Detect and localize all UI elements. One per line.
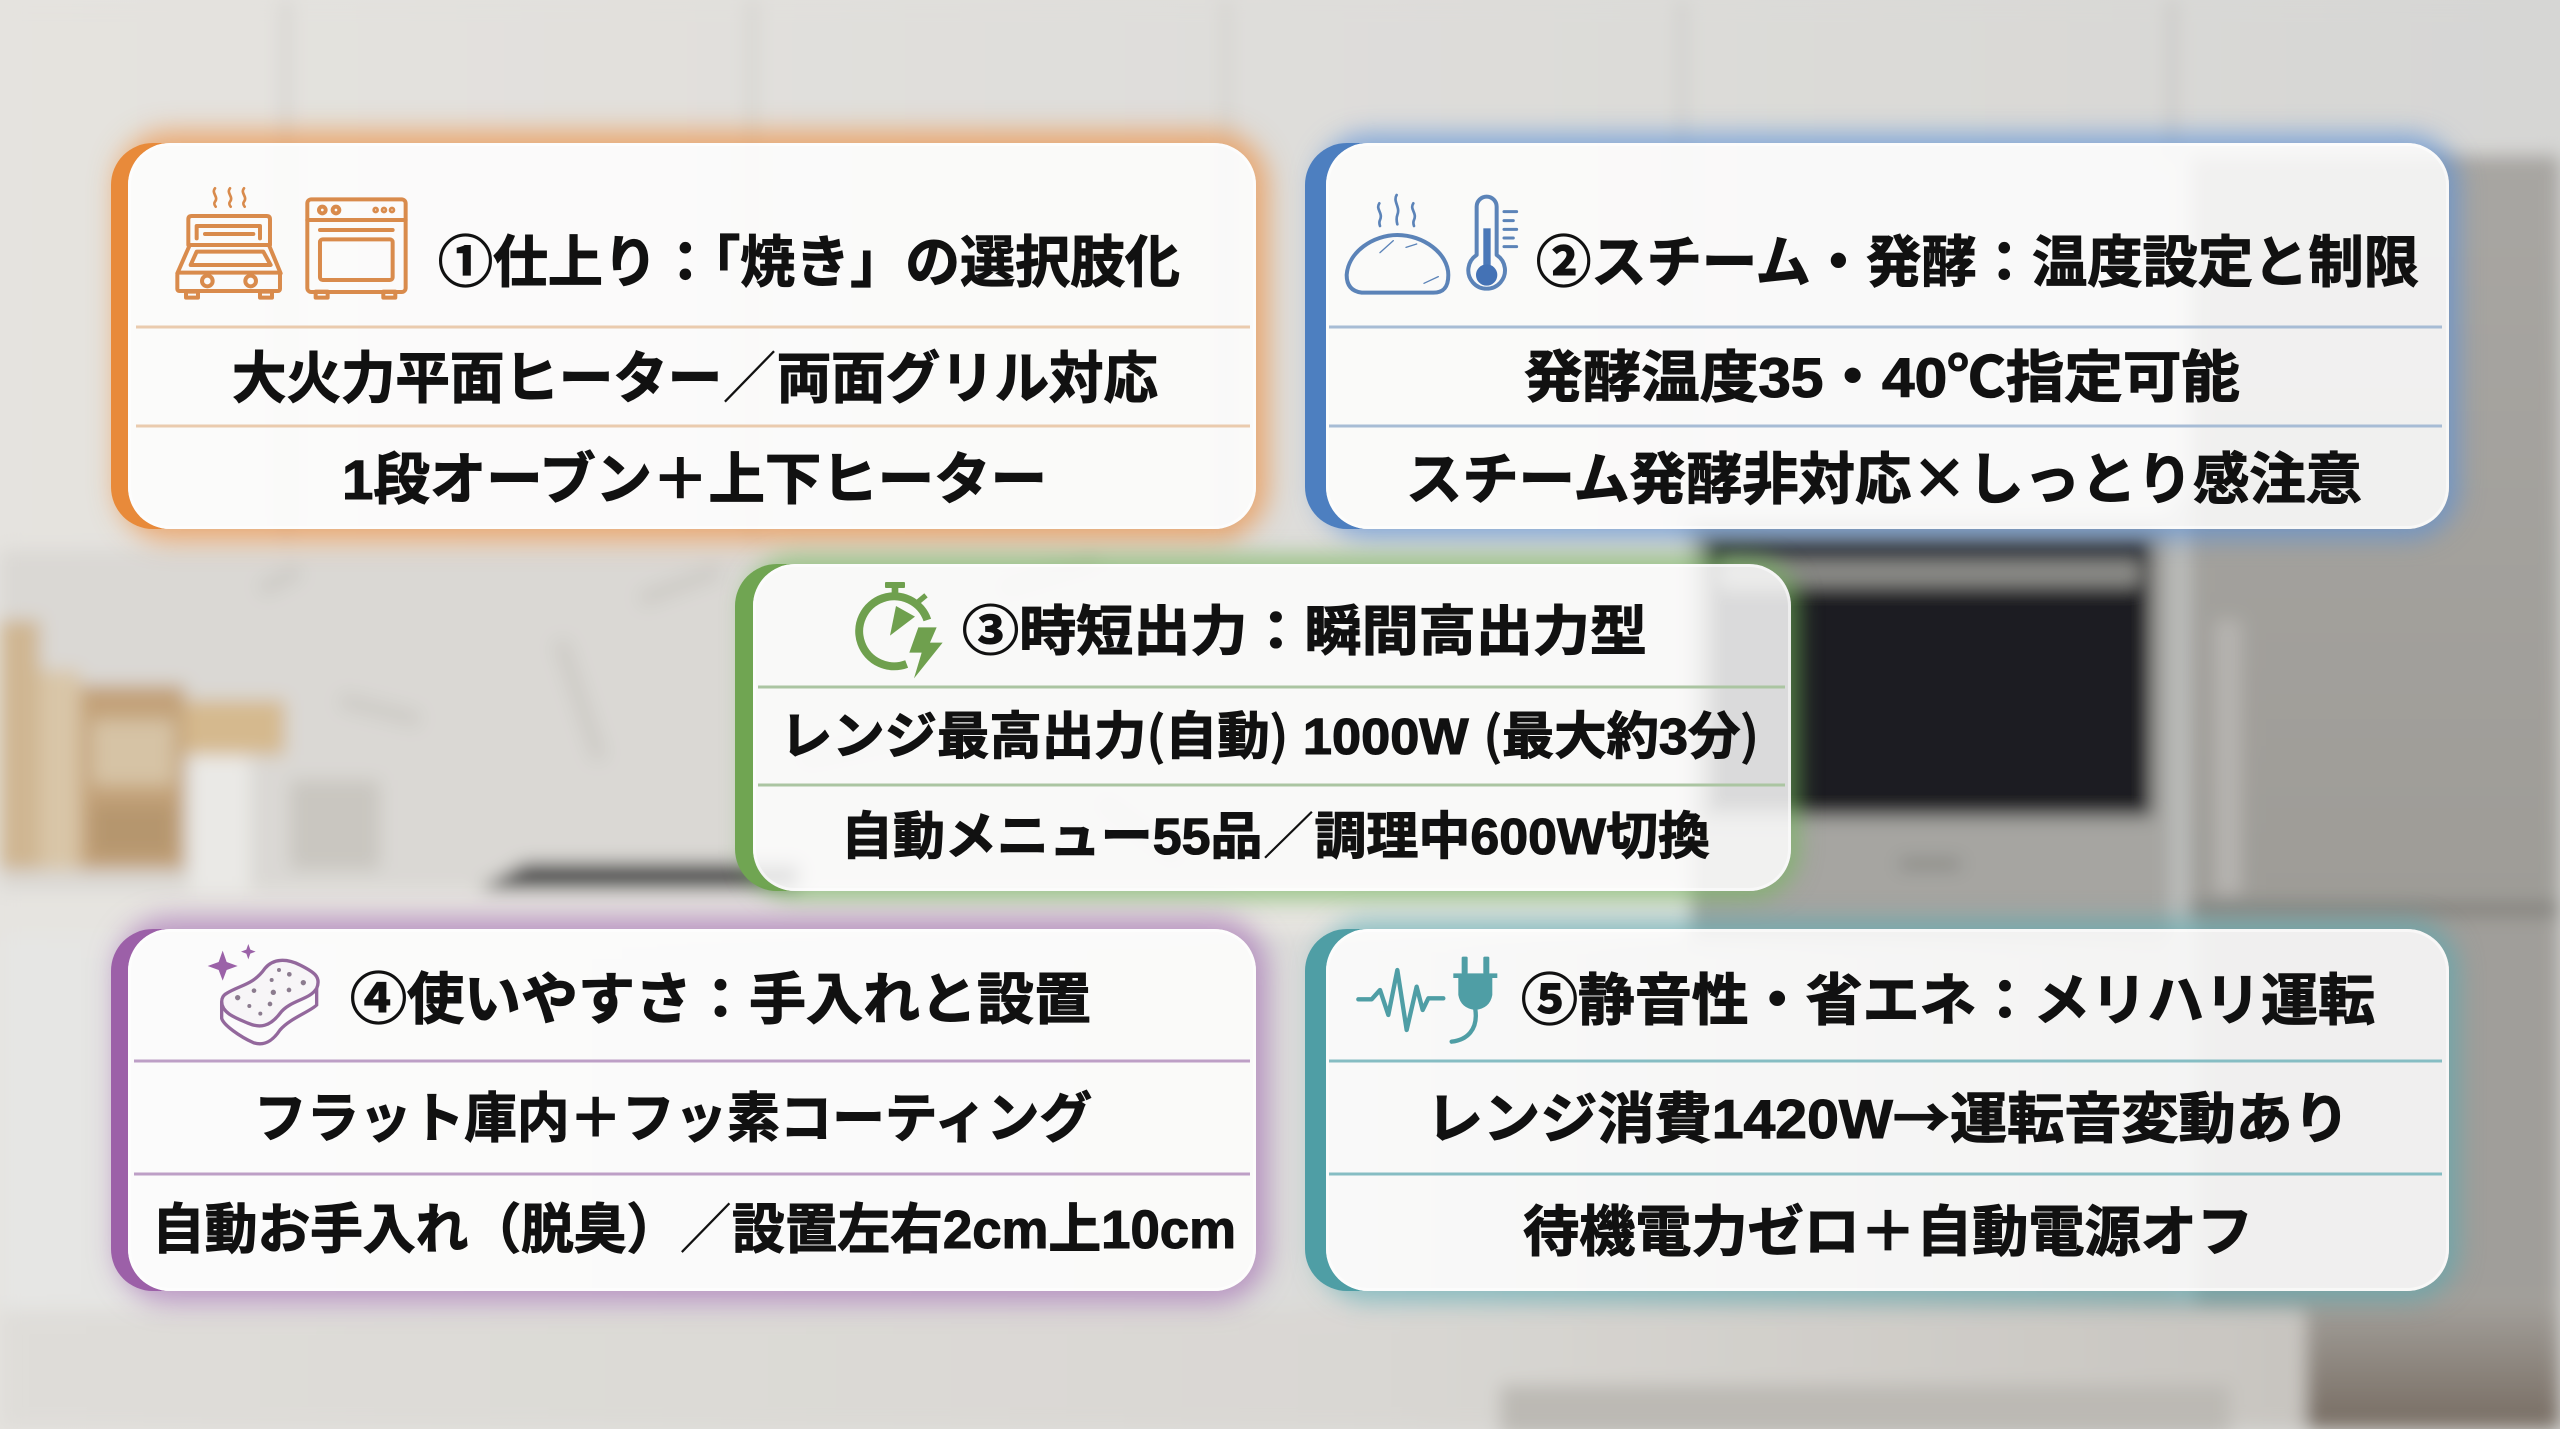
icon: griddle and oven xyxy=(177,188,406,298)
text: auto menu: 自動メニュー55品／調理中600W切換 xyxy=(841,795,1710,869)
text: interior coating: フラット庫内＋フッ素コーティング xyxy=(254,1089,1092,1149)
text: fermentation temperature: 発酵温度35・40℃指定可能 xyxy=(1524,346,2240,409)
heading: ②スチーム・発酵：温度設定と制限 xyxy=(1536,231,2419,294)
icon: sponge with sparkles xyxy=(208,944,318,1044)
panel: quietness and energy saving xyxy=(1326,929,2449,1291)
heading: ⑤静音性・省エネ：メリハリ運転 xyxy=(1521,969,2375,1032)
panel: ease of use xyxy=(128,929,1256,1291)
text: max output: レンジ最高出力(自動) 1000W (最大約3分) xyxy=(780,695,1759,769)
heading: ①仕上り：「焼き」の選択肢化 xyxy=(438,231,1180,294)
text: standby power: 待機電力ゼロ＋自動電源オフ xyxy=(1523,1201,2253,1263)
heading: ④使いやすさ：手入れと設置 xyxy=(350,968,1091,1031)
text: power consumption: レンジ消費1420W →運転音変動あり xyxy=(1426,1074,2350,1154)
panel: finish / grilling xyxy=(128,143,1256,529)
icon: stopwatch with lightning bolt xyxy=(859,582,943,678)
panel: time saving output xyxy=(753,564,1791,891)
text: oven: 1段オーブン＋上下ヒーター xyxy=(342,448,1047,511)
heading: ③時短出力：瞬間高出力型 xyxy=(962,602,1647,662)
icon: bread and thermometer xyxy=(1347,195,1517,293)
text: heater and grill: 大火力平面ヒーター／両面グリル対応 xyxy=(232,334,1158,415)
text: steam caution: スチーム発酵非対応×しっとり感注意 xyxy=(1406,435,2362,516)
icon: sound wave and power plug xyxy=(1358,957,1497,1042)
text: cleaning and installation: 自動お手入れ（脱臭）／設置左右2cm上10cm xyxy=(152,1185,1236,1264)
panel: steam and fermentation xyxy=(1326,143,2449,529)
